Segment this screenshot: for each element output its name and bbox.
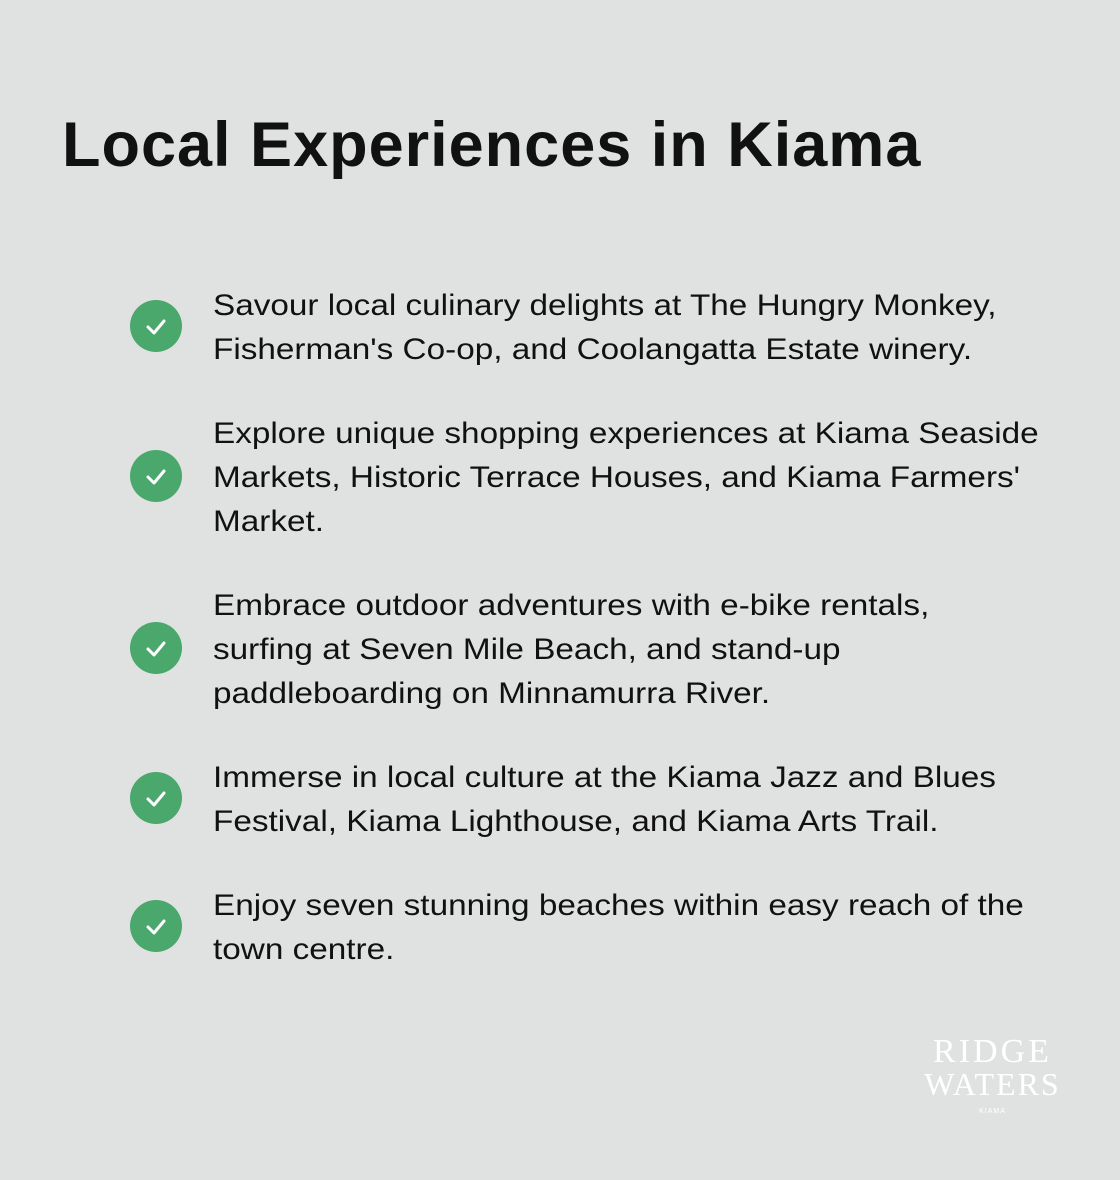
icon: check — [130, 622, 182, 674]
item: outdoor — [130, 589, 929, 710]
text: Market. — [213, 505, 324, 538]
text: surfing at Seven Mile Beach, and stand-up — [213, 633, 841, 666]
text: Festival, Kiama Lighthouse, and Kiama Arts Trail. — [213, 805, 939, 838]
text: Embrace outdoor adventures with e-bike rentals, — [213, 589, 929, 622]
text: Immerse in local culture at the Kiama Jazz and Blues — [213, 761, 996, 794]
text — [213, 417, 1039, 538]
item: culinary — [130, 289, 997, 366]
text: town centre. — [213, 933, 394, 966]
text — [213, 289, 997, 366]
item: beaches — [130, 889, 1024, 966]
icon: check — [130, 300, 182, 352]
icon: check — [130, 450, 182, 502]
text: Explore unique shopping experiences at Kiama Seaside — [213, 417, 1039, 450]
text: Fisherman's Co-op, and Coolangatta Estate winery. — [213, 333, 972, 366]
logo: RIDGE — [933, 1033, 1052, 1070]
text: Markets, Historic Terrace Houses, and Kiama Farmers' — [213, 461, 1020, 494]
logo: KIAMA — [979, 1108, 1006, 1115]
text: Savour local culinary delights at The Hungry Monkey, — [213, 289, 997, 322]
item: shopping — [130, 417, 1039, 538]
icon: check — [130, 772, 182, 824]
icon: check — [130, 900, 182, 952]
item: culture — [130, 761, 996, 838]
text — [213, 761, 996, 838]
text — [213, 589, 929, 710]
text: Enjoy seven stunning beaches within easy reach of the — [213, 889, 1024, 922]
text — [213, 889, 1024, 966]
text: paddleboarding on Minnamurra River. — [213, 677, 770, 710]
title: Local Experiences in Kiama — [62, 110, 921, 180]
logo — [924, 1033, 1061, 1115]
logo: WATERS — [924, 1066, 1061, 1102]
